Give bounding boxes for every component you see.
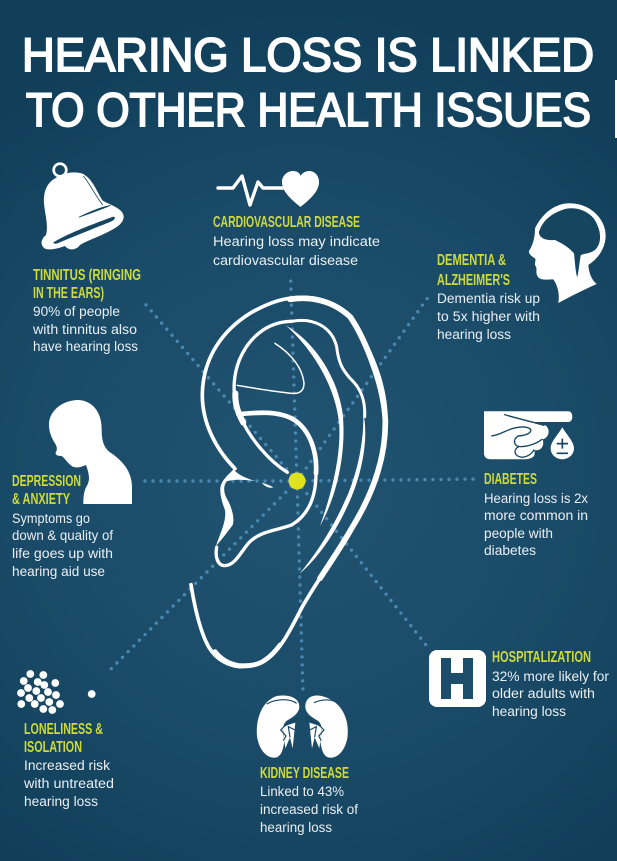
text: dementia: hearing loss (437, 327, 511, 342)
text: kidney disease: KIDNEY DISEASE (260, 765, 349, 782)
icon: bowed head person (49, 400, 132, 504)
text: loneliness: hearing loss (24, 794, 98, 809)
left kidney (257, 696, 299, 758)
icon: heart with pulse (218, 171, 319, 207)
text: depression: life goes up with (12, 546, 113, 561)
text: kidney disease: Linked to 43% (260, 784, 344, 799)
icon: bell (42, 164, 124, 249)
ear illustration (191, 297, 386, 667)
text: diabetes (484, 471, 588, 558)
text: kidney disease (260, 765, 358, 835)
text: depression: & ANXIETY (12, 491, 70, 508)
text: tinnitus (32, 267, 141, 354)
text: kidney disease: increased risk of (260, 802, 358, 817)
text: depression: down & quality of (12, 528, 113, 543)
text: cardiovascular disease: Hearing loss may indicate (213, 234, 380, 249)
icon: hand and blood drop (484, 411, 574, 459)
text: depression: DEPRESSION (12, 473, 81, 490)
text: loneliness: with untreated (23, 776, 114, 791)
icon: cluster of dots (17, 670, 96, 714)
ear upper cavity curve (237, 343, 304, 393)
text: tinnitus: TINNITUS (RINGING (33, 267, 141, 284)
text: tinnitus: have hearing loss (33, 339, 138, 354)
text: depression: Symptoms go (12, 511, 90, 526)
text: diabetes: diabetes (484, 543, 536, 558)
text: diabetes: DIABETES (484, 471, 537, 488)
icon: hospital H (429, 650, 486, 707)
ear antihelix inner fold (286, 326, 344, 526)
text: tinnitus: 90% of people (33, 304, 120, 319)
text: cardiovascular disease: CARDIOVASCULAR DISEASE (213, 214, 360, 231)
text: cardiovascular disease (213, 214, 380, 268)
text: dementia (437, 252, 540, 342)
text: dementia: ALZHEIMER'S (437, 272, 510, 289)
text: hospitalization: hearing loss (492, 704, 566, 719)
text: kidney disease: hearing loss (260, 820, 332, 835)
text: hospitalization: 32% more likely for (492, 669, 610, 684)
ear tragus and antitragus (216, 469, 255, 546)
text: dementia: DEMENTIA & (437, 252, 506, 269)
text: dementia: Dementia risk up (437, 291, 540, 306)
text: diabetes: more common in (484, 508, 588, 523)
blood drop (551, 427, 574, 459)
text: loneliness: Increased risk (24, 758, 110, 773)
text: hospitalization (492, 649, 610, 719)
text: tinnitus: IN THE EARS) (33, 285, 104, 302)
ear concha band (216, 413, 316, 566)
text: hospitalization: older adults with (492, 686, 595, 701)
title: HEARING LOSS IS LINKED (22, 28, 594, 81)
text: depression: hearing aid use (12, 564, 105, 579)
text: diabetes: Hearing loss is 2x (484, 491, 588, 506)
centre dot (288, 472, 306, 490)
ear inner helix (234, 320, 365, 574)
icon: kidneys (257, 696, 348, 758)
text: dementia: to 5x higher with (437, 309, 540, 324)
text: cardiovascular disease: cardiovascular disease (213, 253, 358, 268)
text: loneliness: ISOLATION (24, 739, 82, 756)
icon: head with brain (529, 203, 606, 303)
right kidney (305, 696, 348, 758)
text: tinnitus: with tinnitus also (32, 322, 137, 337)
ear outer helix and lobe (191, 297, 386, 667)
title (22, 28, 594, 136)
ear tragus tick (262, 483, 273, 488)
text: loneliness: LONELINESS & (24, 721, 103, 738)
text: loneliness (23, 721, 114, 809)
text: diabetes: people with (484, 526, 553, 541)
text: depression (12, 473, 113, 579)
